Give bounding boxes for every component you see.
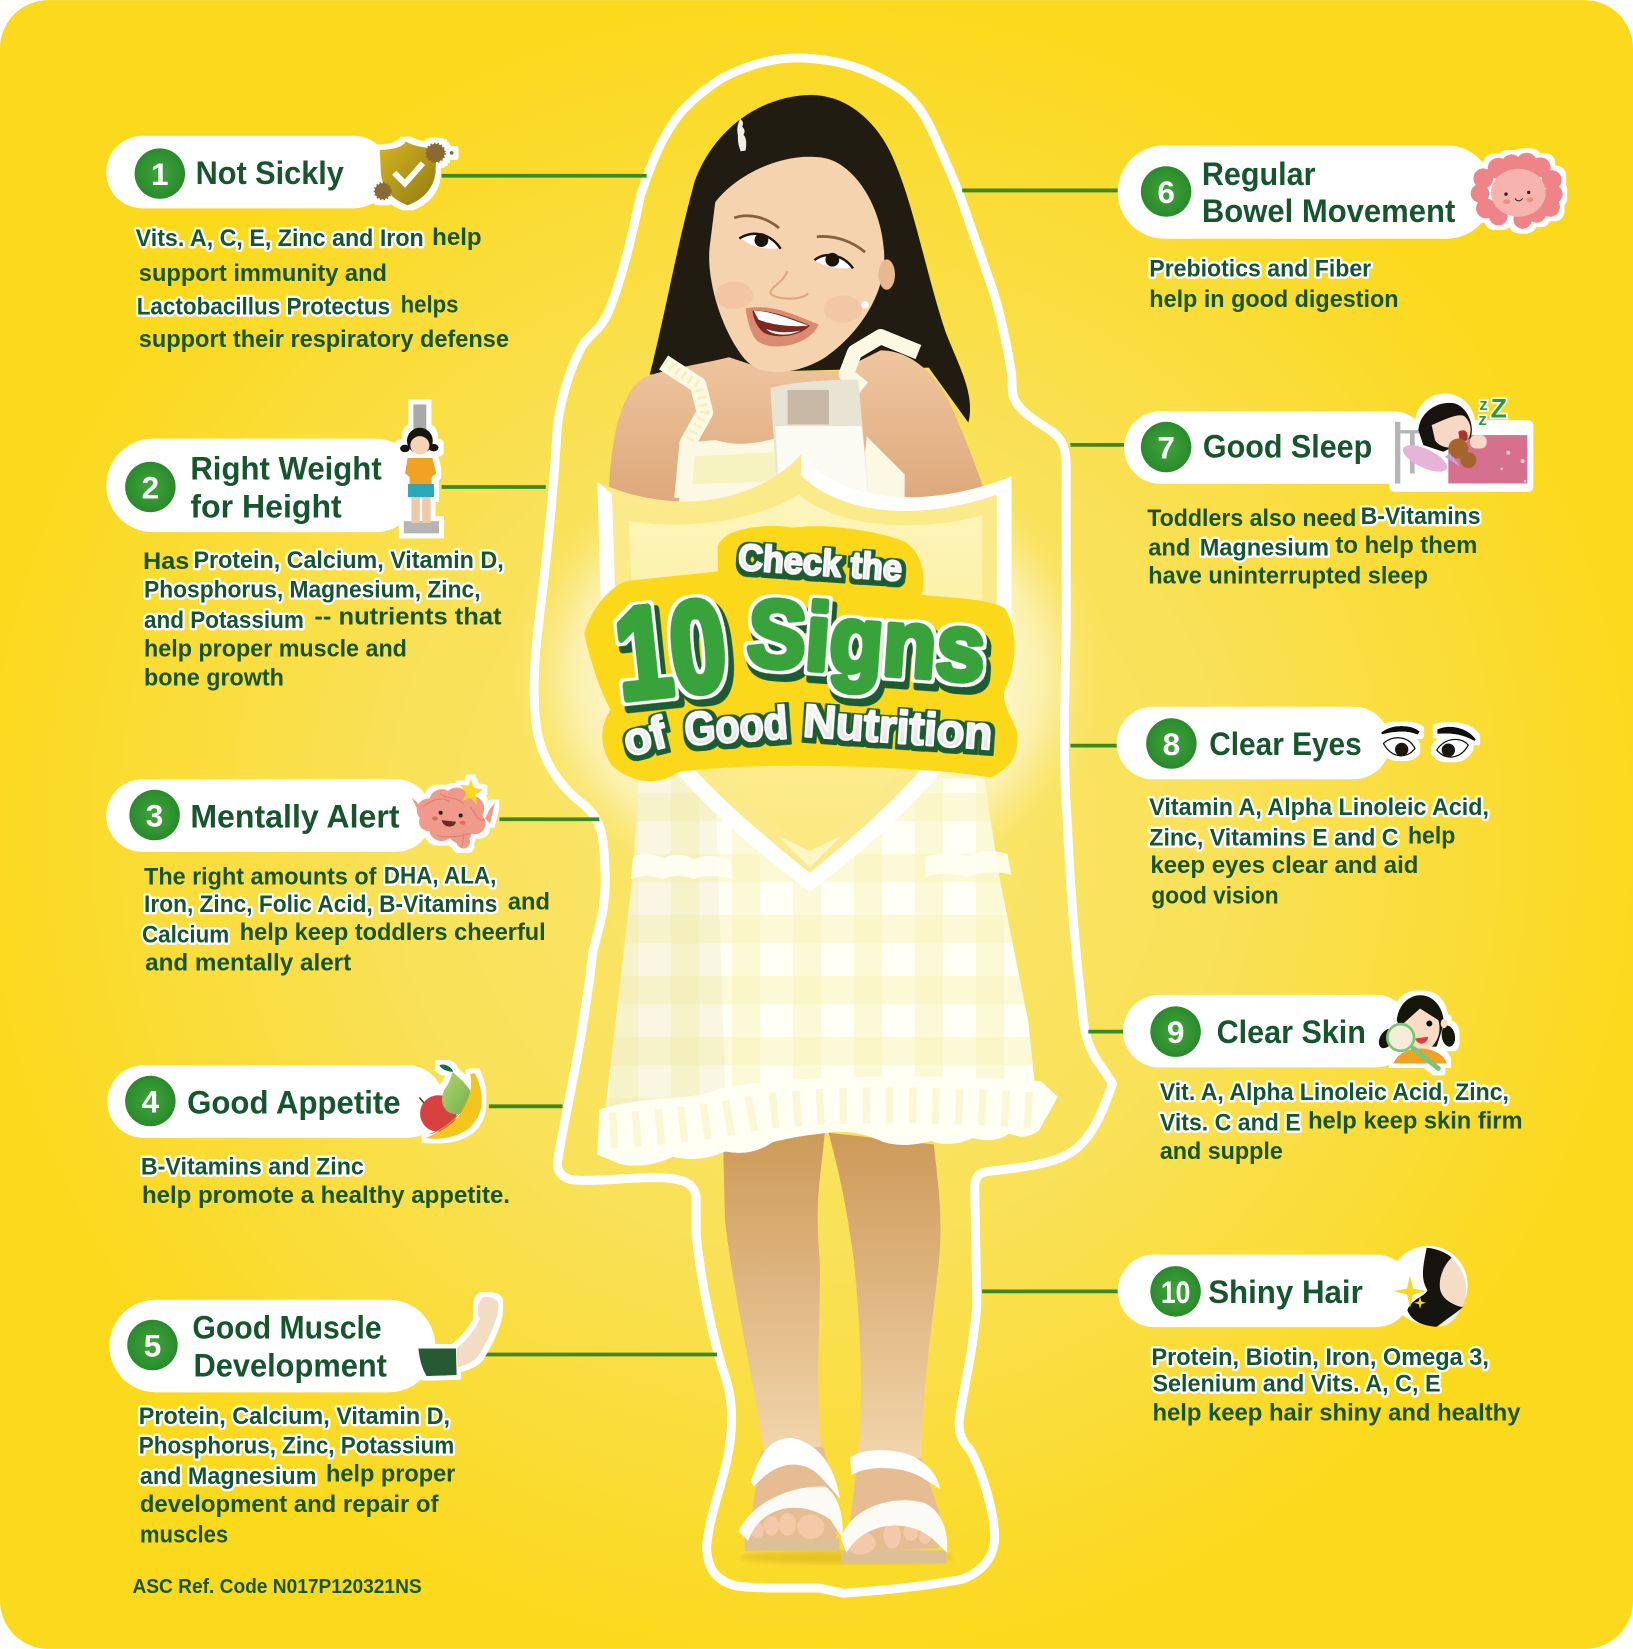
sign 6: regular bowel movement: 6 — [1157, 174, 1175, 210]
text block 2: bone growth — [144, 665, 284, 692]
sign 1: not sickly: 1 — [151, 156, 169, 192]
text block 7: Toddlers also need — [1147, 505, 1356, 532]
text block 9 — [1160, 1079, 1523, 1165]
text block 3: Calcium — [142, 921, 229, 948]
pill 5 — [109, 1300, 435, 1392]
number 10 — [1150, 1266, 1201, 1317]
heading 2: Right Weight — [190, 450, 382, 487]
text block 1: Vits. A, C, E, Zinc and Iron — [136, 225, 424, 252]
text block 7: Magnesium — [1200, 534, 1329, 561]
number 4 — [125, 1076, 176, 1126]
text block 5 — [139, 1403, 456, 1549]
text block 1: Lactobacillus Protectus — [137, 294, 390, 321]
text block 2: and Potassium — [144, 607, 304, 634]
heading 9: Clear Skin — [1217, 1013, 1366, 1050]
number 5 — [127, 1320, 178, 1370]
text block 5: development and repair of — [140, 1491, 439, 1518]
number 6 — [1141, 166, 1191, 217]
pill 4 — [107, 1065, 444, 1138]
text block 7 — [1147, 503, 1481, 590]
text block 1: help — [432, 224, 482, 251]
heading 2 — [190, 450, 382, 524]
hair, face and torso — [608, 95, 985, 512]
number 8 — [1146, 718, 1197, 769]
pill 8 — [1117, 707, 1390, 779]
text block 2: Protein, Calcium, Vitamin D, — [193, 547, 504, 574]
text block 8: good vision — [1151, 882, 1279, 909]
text block 10: Selenium and Vits. A, C, E — [1152, 1370, 1441, 1397]
heading 3: Mentally Alert — [190, 798, 400, 835]
title: 10: 10 — [609, 573, 733, 727]
text block 3: DHA, ALA, — [384, 862, 496, 889]
sign 5: good muscle development: 5 — [144, 1328, 161, 1364]
title: of good nutrition: of — [618, 706, 672, 766]
girl illustration — [597, 95, 1058, 1564]
heading 2: for Height — [190, 487, 342, 524]
text block 6: Prebiotics and Fiber — [1149, 256, 1372, 283]
text block 7: B-Vitamins — [1361, 503, 1481, 530]
text block 6: help in good digestion — [1149, 286, 1399, 313]
pill 1 — [106, 136, 390, 208]
pill 10 — [1118, 1255, 1412, 1327]
heading 7: Good Sleep — [1203, 428, 1372, 465]
text block 1: support immunity and — [139, 260, 387, 287]
girl silhouette outline — [534, 58, 1113, 1593]
sign 9: clear skin: 9 — [1167, 1014, 1184, 1050]
pill 2 — [106, 439, 422, 532]
icon: flexed arm — [418, 1297, 499, 1376]
text block 9: Vit. A, Alpha Linoleic Acid, Zinc, — [1160, 1079, 1509, 1106]
pill 6 — [1118, 145, 1493, 239]
shield glow — [555, 473, 1060, 873]
text block 7: and — [1148, 534, 1190, 561]
title: Nutrition — [802, 694, 994, 759]
sign 4: good appetite: 4 — [142, 1084, 160, 1120]
sign 1: not sickly — [106, 136, 509, 353]
heading 10: Shiny Hair — [1208, 1273, 1363, 1310]
dress skirt — [597, 778, 1058, 1166]
icon: sleeping girl — [1389, 393, 1533, 492]
heading 5: Good Muscle — [192, 1309, 382, 1346]
icon: brain — [412, 778, 495, 848]
icon: eyes — [1382, 727, 1475, 757]
title: check the: Check the — [737, 537, 903, 589]
heading 6 — [1202, 155, 1455, 229]
icon: shiny hair profile — [1389, 1246, 1468, 1327]
text block 10: help keep hair shiny and healthy — [1152, 1400, 1521, 1427]
pill 9 — [1123, 995, 1412, 1067]
title yellow badge — [587, 528, 1015, 779]
text block 3: and mentally alert — [145, 950, 351, 977]
icon: fruits — [419, 1064, 482, 1139]
text block 2: help proper muscle and — [144, 635, 407, 662]
number 7 — [1141, 422, 1191, 472]
sign 2: right weight for height — [106, 404, 504, 692]
text block 1: helps — [401, 291, 458, 318]
title: signs: Signs — [744, 580, 989, 702]
connector lines — [442, 176, 1124, 1354]
heading 6: Regular — [1202, 155, 1316, 192]
text block 3: The right amounts of — [144, 863, 377, 890]
sign 7: good sleep: 7 — [1157, 430, 1175, 466]
icon: girl on scale — [400, 404, 439, 533]
text block 3: Iron, Zinc, Folic Acid, B-Vitamins — [144, 891, 497, 918]
number 3 — [129, 790, 180, 840]
legs and sandals — [723, 1130, 954, 1564]
text block 5: and Magnesium — [140, 1463, 317, 1490]
sign 3: mentally alert: 3 — [146, 798, 163, 834]
text block 10 — [1151, 1344, 1521, 1427]
number 2 — [125, 462, 176, 512]
icon: intestine — [1471, 153, 1563, 229]
dress hem ruffle — [597, 1076, 1058, 1166]
text block 6 — [1149, 256, 1399, 313]
sign 10: shiny hair — [1118, 1246, 1521, 1427]
title: Good — [683, 696, 789, 755]
text block 5: Protein, Calcium, Vitamin D, — [139, 1403, 450, 1430]
icon: sleeping girl: z — [1479, 395, 1488, 414]
number 9 — [1150, 1006, 1201, 1057]
sign 8: clear eyes — [1117, 707, 1489, 909]
text block 5: muscles — [140, 1522, 228, 1549]
text block 5: Phosphorus, Zinc, Potassium — [139, 1432, 454, 1459]
heading 1: Not Sickly — [196, 154, 344, 191]
sign 5: good muscle development — [109, 1297, 499, 1549]
text block 1 — [136, 224, 509, 353]
text block 1: support their respiratory defense — [139, 326, 509, 353]
text block 9: and supple — [1160, 1138, 1283, 1165]
title — [587, 528, 1015, 779]
text block 8: Zinc, Vitamins E and C — [1149, 825, 1399, 852]
sign 3: mentally alert — [106, 778, 550, 977]
text block 8: Vitamin A, Alpha Linoleic Acid, — [1149, 794, 1489, 821]
text block 7: have uninterrupted sleep — [1148, 563, 1428, 590]
text block 2: Phosphorus, Magnesium, Zinc, — [144, 576, 481, 603]
icon: sleeping girl: z — [1478, 410, 1487, 429]
sign 4: good appetite — [107, 1064, 510, 1209]
sign 10: shiny hair: 10 — [1161, 1274, 1190, 1310]
sign 6: regular bowel movement — [1118, 145, 1563, 313]
text block 9: help keep skin firm — [1308, 1107, 1523, 1134]
text block 9: Vits. C and E — [1160, 1109, 1301, 1136]
text block 2: -- nutrients that — [314, 604, 502, 631]
sign 7: good sleep — [1124, 393, 1533, 590]
icon: girl with magnifier — [1376, 995, 1457, 1068]
heading 6: Bowel Movement — [1202, 192, 1455, 229]
sign 8: clear eyes: 8 — [1163, 726, 1180, 762]
reference code: ASC Ref. Code N017P120321NS — [132, 1576, 422, 1598]
sign 9: clear skin — [1123, 995, 1523, 1165]
icon: sleeping girl: Z — [1491, 393, 1507, 423]
text block 4 — [141, 1154, 510, 1209]
text block 3: help keep toddlers cheerful — [240, 919, 546, 946]
text block 3: and — [508, 889, 550, 916]
pill 3 — [106, 779, 432, 852]
text block 5: help proper — [326, 1461, 456, 1488]
number 1 — [135, 148, 185, 199]
heading 4: Good Appetite — [187, 1084, 401, 1121]
text block 2 — [143, 547, 504, 692]
heading 5 — [192, 1309, 387, 1384]
text block 4: help promote a healthy appetite. — [142, 1182, 510, 1209]
text block 8: keep eyes clear and aid — [1150, 852, 1418, 879]
text block 8: help — [1408, 822, 1455, 849]
text block 4: B-Vitamins and Zinc — [141, 1154, 364, 1181]
text block 3 — [142, 862, 550, 977]
pill 7 — [1124, 411, 1429, 484]
heading 8: Clear Eyes — [1209, 725, 1362, 762]
icon: shield with germs — [375, 141, 454, 205]
text block 7: to help them — [1335, 532, 1477, 559]
text block 10: Protein, Biotin, Iron, Omega 3, — [1151, 1344, 1489, 1371]
shield — [597, 454, 1012, 892]
text block 8 — [1149, 794, 1489, 909]
sign 2: right weight for height: 2 — [142, 470, 159, 506]
heading 5: Development — [193, 1347, 387, 1384]
text block 2: Has — [143, 548, 189, 575]
